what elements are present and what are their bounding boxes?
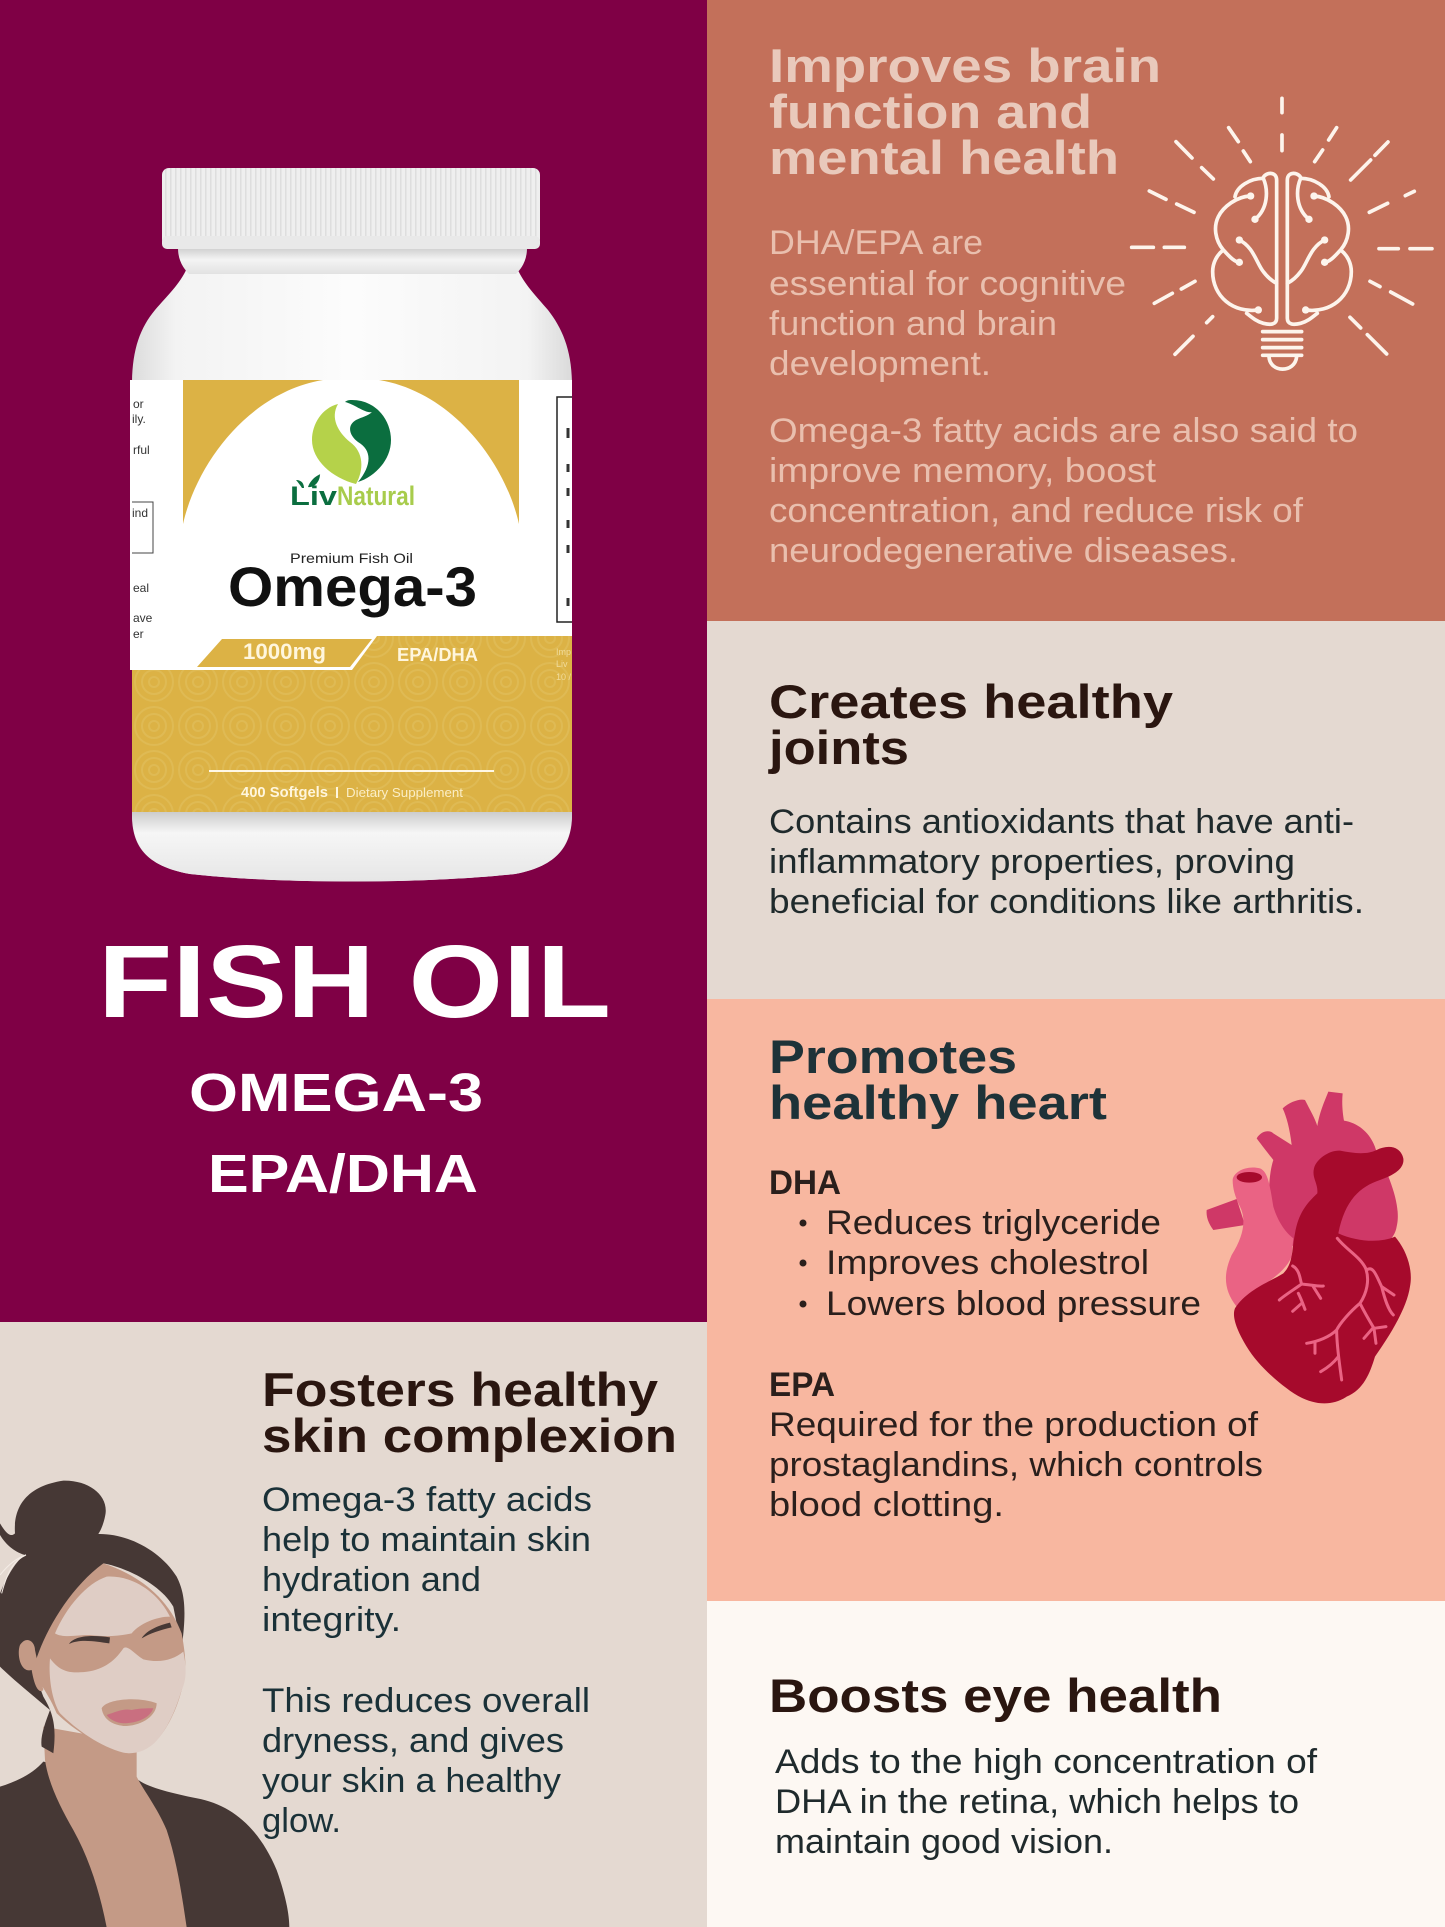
- text block: DHA list: DHA: [769, 1164, 841, 1202]
- subtitle: OMEGA-3: OMEGA-3: [189, 1063, 483, 1123]
- logo small leaves: [296, 474, 320, 488]
- text block: brain details: neurodegenerative diseases.: [769, 532, 1238, 570]
- logo: [296, 400, 391, 488]
- wrapped label text left: ind: [132, 506, 148, 520]
- text block: DHA list: Reduces triglyceride: [826, 1204, 1161, 1242]
- heading: skin: [262, 1363, 677, 1462]
- heading: heart: [769, 1030, 1107, 1129]
- title: FISH OIL: FISH OIL: [98, 924, 611, 1039]
- text block: brain intro: development.: [769, 345, 991, 383]
- text block: joints: [769, 803, 1364, 921]
- text block: brain intro: essential for cognitive: [769, 265, 1126, 303]
- text block: brain intro: [769, 224, 1126, 383]
- heading: brain: mental health: [769, 131, 1119, 184]
- bottle base: [132, 812, 572, 882]
- icon: brain light bulb: [1132, 98, 1432, 369]
- text block: DHA list: Improves cholestrol: [826, 1244, 1149, 1282]
- wrapped label text left: ily.: [132, 412, 146, 426]
- panel: joints background: [707, 621, 1445, 999]
- subtitle: EPA/DHA: EPA/DHA: [208, 1144, 478, 1204]
- text block: EPA: [769, 1366, 1263, 1524]
- wrapped importer text right: Imp: [556, 647, 571, 657]
- wrapped label text left: ave: [133, 611, 153, 625]
- panel: brain function background: [707, 0, 1445, 621]
- panel: heart background: [707, 999, 1445, 1601]
- panel: skin background: [0, 1322, 707, 1927]
- supplement note: Dietary Supplement: [346, 785, 463, 800]
- text block: skin hydration: [262, 1481, 592, 1639]
- logo light leaf: [312, 404, 361, 484]
- text block: EPA: Required for the production of: [769, 1406, 1259, 1444]
- text block: DHA list: Lowers blood pressure: [826, 1285, 1201, 1323]
- bottle neck: [178, 248, 527, 274]
- dose: 1000mg: [243, 639, 326, 664]
- label rule: [209, 770, 494, 772]
- panel: eye health background: [707, 1601, 1445, 1927]
- heading: eye health: Boosts eye health: [769, 1669, 1222, 1722]
- product name: Omega-3: [228, 555, 477, 618]
- text block: joints: inflammatory properties, proving: [769, 843, 1295, 881]
- bottle cap: [162, 168, 540, 249]
- 1000mg tab: [197, 639, 372, 667]
- illustration: woman with face mask: [0, 1481, 289, 1927]
- text block: skin glow: dryness, and gives: [262, 1722, 564, 1760]
- heading: skin: skin complexion: [262, 1409, 677, 1462]
- text block: skin glow: This reduces overall: [262, 1682, 590, 1720]
- text block: eye health: maintain good vision.: [775, 1823, 1113, 1861]
- heading: brain: function and: [769, 85, 1092, 138]
- text block: brain details: Omega-3 fatty acids are also said to: [769, 412, 1358, 450]
- text block: skin glow: glow.: [262, 1802, 341, 1840]
- cap lower lip: [162, 236, 540, 249]
- facts box fragments: [566, 428, 570, 606]
- heading: brain: [769, 39, 1161, 184]
- text block: EPA: prostaglandins, which controls: [769, 1446, 1263, 1484]
- text block: skin glow: your skin a healthy: [262, 1762, 561, 1800]
- heading: heart: Promotes: [769, 1030, 1017, 1083]
- heading: heart: healthy heart: [769, 1076, 1107, 1129]
- text block: brain intro: DHA/EPA are: [769, 224, 983, 262]
- heading: joints: joints: [768, 721, 909, 774]
- label gold arch: [183, 380, 519, 524]
- LivNatural wordmark second part: Natural: [337, 481, 415, 511]
- heading: brain: Improves brain: [769, 39, 1161, 92]
- text block: joints: beneficial for conditions like arthritis.: [769, 883, 1364, 921]
- text block: skin hydration: integrity.: [262, 1601, 401, 1639]
- EPA DHA tag: EPA/DHA: [397, 645, 478, 665]
- panel: purple product background: [0, 0, 707, 1322]
- text block: EPA: blood clotting.: [769, 1486, 1004, 1524]
- text block: skin hydration: hydration and: [262, 1561, 481, 1599]
- text block: joints: Contains antioxidants that have anti-: [769, 803, 1354, 841]
- cap ribbed band: [162, 168, 540, 246]
- text block: skin hydration: Omega-3 fatty acids: [262, 1481, 592, 1519]
- wrapped label text left: [132, 397, 153, 641]
- logo dark circle: [345, 400, 391, 482]
- text block: brain details: [769, 412, 1358, 570]
- heading: joints: [768, 675, 1173, 774]
- wrapped label text left: rful: [133, 443, 150, 457]
- wrapped facts box right: [557, 397, 572, 622]
- label white area: [130, 380, 572, 670]
- wrapped label text left: or: [133, 397, 144, 411]
- text block: skin hydration: help to maintain skin: [262, 1521, 591, 1559]
- text block: eye health: [775, 1743, 1318, 1861]
- label gold band: [132, 636, 572, 812]
- product bottle: [130, 168, 572, 882]
- text block: brain details: improve memory, boost: [769, 452, 1157, 490]
- separator: [336, 787, 338, 798]
- heading: joints: Creates healthy: [769, 675, 1173, 728]
- wrapped label text left: er: [133, 627, 144, 641]
- text block: brain details: concentration, and reduce risk of: [769, 492, 1304, 530]
- text block: skin glow: [262, 1682, 590, 1840]
- text block: brain intro: function and brain: [769, 305, 1057, 343]
- wrapped label text left: eal: [133, 581, 149, 595]
- wrapped importer text right: [556, 647, 572, 682]
- heading: skin: Fosters healthy: [262, 1363, 658, 1416]
- text block: EPA: EPA: [769, 1366, 835, 1404]
- text block: eye health: Adds to the high concentration of: [775, 1743, 1318, 1781]
- wrapped importer text right: Liv: [556, 659, 568, 669]
- softgel count: 400 Softgels: [241, 784, 328, 801]
- text block: eye health: DHA in the retina, which helps to: [775, 1783, 1299, 1821]
- text block: DHA list: [769, 1164, 1201, 1323]
- product subtitle: Premium Fish Oil: [290, 550, 413, 566]
- bottle body: [132, 268, 572, 882]
- icon: heart: [1207, 1092, 1411, 1403]
- wrapped importer text right: 10 /: [556, 672, 572, 682]
- LivNatural wordmark: Liv: [290, 481, 337, 511]
- wrapped box left: [132, 502, 153, 553]
